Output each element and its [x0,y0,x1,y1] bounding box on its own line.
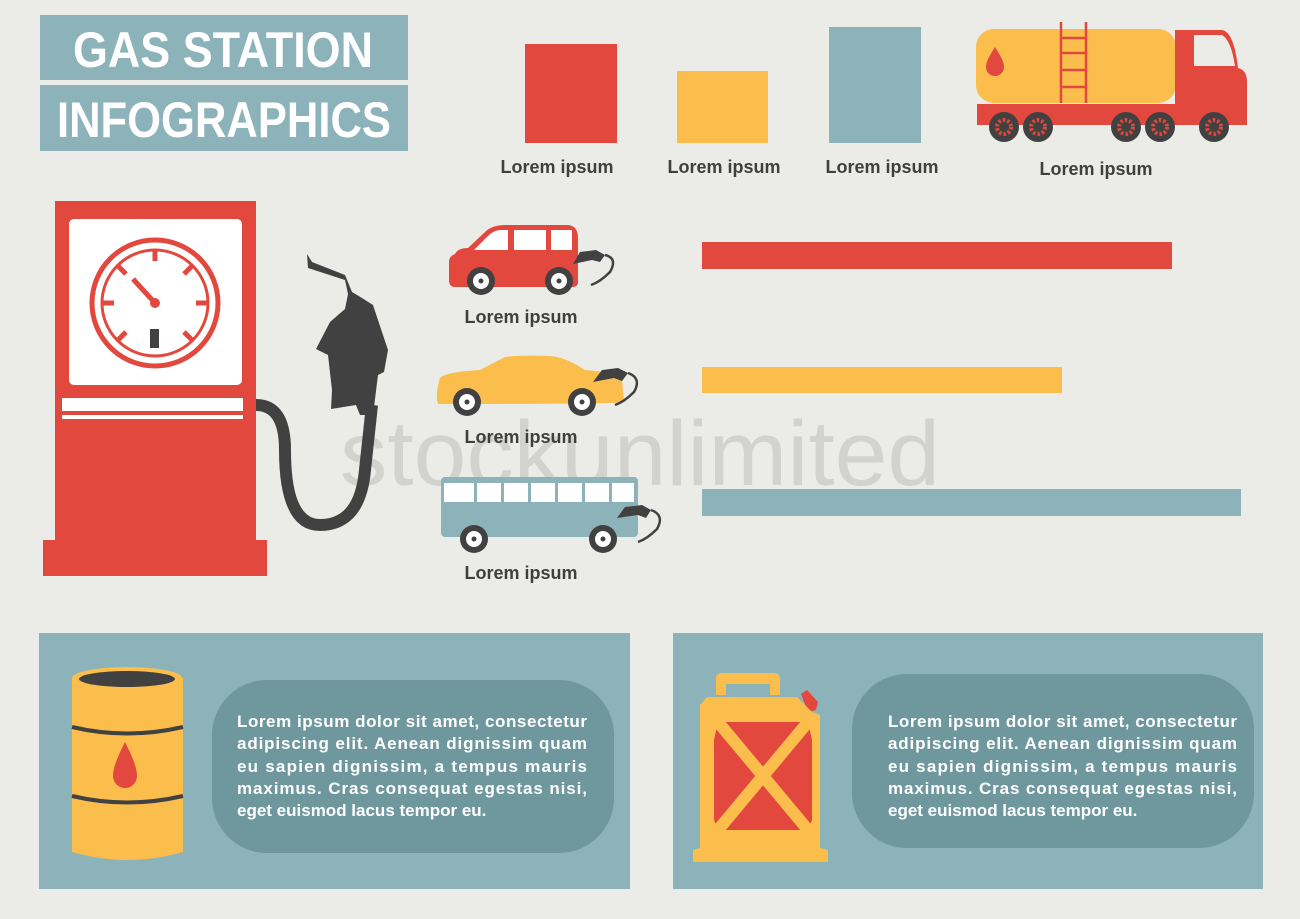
chart: squares: Lorem ipsum [1039,159,1153,179]
icon: car [437,356,637,447]
text block: maximus. Cras consequat egestas nisi, [237,779,587,798]
text block: eget euismod lacus tempor eu. [888,801,1137,820]
icon: barrel [72,667,183,860]
icon: bus [441,477,660,583]
text block: Lorem ipsum dolor sit amet, consectetur [237,712,587,731]
icon: jerrycan [693,673,828,862]
text block: eu sapien dignissim, a tempus mauris [237,757,587,776]
icon: van: Lorem ipsum [464,307,578,327]
panel: jerrycan [673,633,1263,889]
chart: squares [500,27,1153,179]
text block: eu sapien dignissim, a tempus mauris [888,757,1237,776]
icon: hose and nozzle [256,254,388,525]
icon: bus: Lorem ipsum [464,563,578,583]
icon: van [449,225,613,327]
text block: adipiscing elit. Aenean dignissim quam [237,734,587,753]
text: stockunlimited [340,403,940,505]
chart: squares: Lorem ipsum [825,157,939,177]
title: INFOGRAPHICS [57,92,391,148]
icon: fuel pump [43,201,267,576]
text block: adipiscing elit. Aenean dignissim quam [888,734,1237,753]
icon: car: Lorem ipsum [464,427,578,447]
title: GAS STATION [73,22,373,78]
text block [212,680,614,853]
panel: barrel [39,633,630,889]
chart: squares: Lorem ipsum [500,157,614,177]
text block: maximus. Cras consequat egestas nisi, [888,779,1237,798]
icon: tanker truck [976,22,1247,142]
title [40,15,408,151]
text block: eget euismod lacus tempor eu. [237,801,486,820]
chart: squares: Lorem ipsum [667,157,781,177]
text block: Lorem ipsum dolor sit amet, consectetur [888,712,1237,731]
bar chart [702,242,1241,516]
text block [852,674,1254,848]
